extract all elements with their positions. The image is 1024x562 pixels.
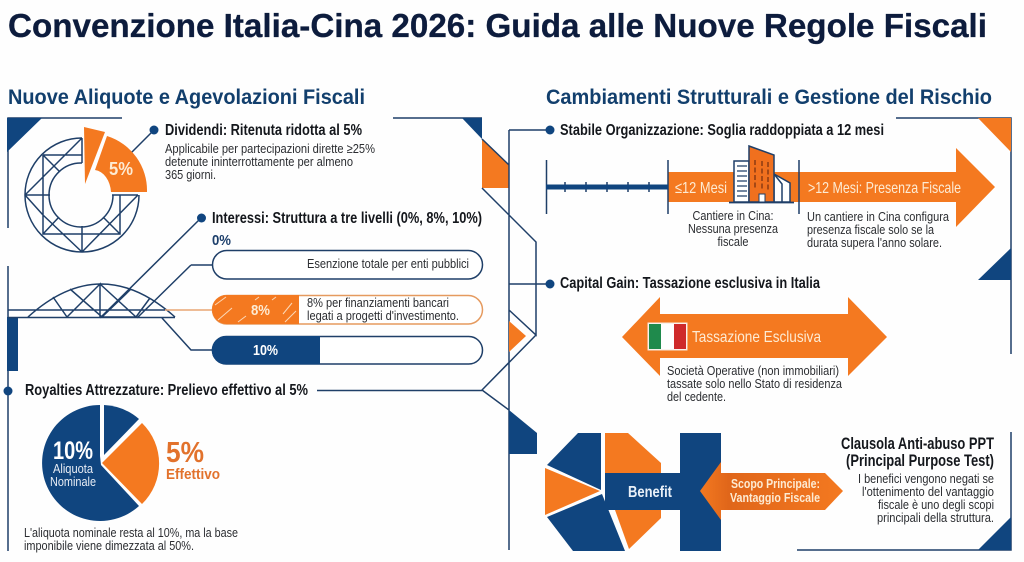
text: clausola PPT: fiscale è uno degli scopi (878, 497, 994, 512)
text: cantiere short: Cantiere in Cina: (692, 208, 774, 223)
text: cantiere short: Nessuna presenza (688, 221, 779, 236)
text: clausola PPT: principali della struttura. (877, 510, 994, 525)
icon: truss bridge (8, 218, 212, 350)
block: interessi heading: Interessi: Struttura a tre livelli (0%, 8%, 10%) (212, 210, 482, 227)
arrow: timeline orange arrow (668, 148, 995, 227)
block: dividendi (132, 122, 375, 182)
diagram: benefit shapes: Scopo Principale: (731, 476, 820, 491)
text: cantiere long: Un cantiere in Cina configura (807, 209, 950, 224)
text: capital gain note: tassate solo nello Stato di residenza (667, 376, 843, 391)
icon: italian flag (648, 323, 687, 350)
chart: royalties pie: 10% (53, 437, 93, 465)
heading: left section: Nuove Aliquote e Agevolazioni Fiscali (8, 85, 365, 109)
diagram: benefit shapes: Benefit (628, 484, 673, 501)
pill: 0%: Esenzione totale per enti pubblici (307, 256, 469, 271)
label: 5%: 5% (109, 159, 133, 179)
chart: timeline: ≤12 Mesi (675, 180, 727, 197)
pill: 0% (212, 250, 482, 279)
label: 5% effettivo (166, 437, 220, 483)
icon: buildings (729, 146, 794, 202)
text: capital gain note: Società Operative (non immobiliari) (667, 363, 839, 378)
pill: 8%: 8% per finanziamenti bancari (307, 295, 449, 310)
text: cantiere long: durata supera l'anno solare. (807, 235, 942, 250)
panel: left frame (7, 118, 482, 551)
text: royalties note: imponibile viene dimezzata al 50%. (24, 538, 194, 553)
chart: royalties pie (42, 405, 159, 521)
text: clausola PPT: I benefici vengono negati se (858, 471, 994, 486)
text: royalties note (24, 525, 238, 553)
block: dividendi: Applicabile per partecipazioni dirette ≥25% (165, 141, 375, 156)
pill: 8%: 8% (251, 302, 270, 319)
text: cantiere long (807, 209, 950, 250)
text: capital gain note (667, 363, 843, 404)
panel: central connector (317, 130, 550, 550)
pill: 10%: 10% (253, 342, 278, 359)
title: Convenzione Italia-Cina 2026: Guida alle Nuove Regole Fiscali (8, 8, 987, 45)
arrow: scopo principale (700, 462, 843, 520)
block: dividendi: Dividendi: Ritenuta ridotta al 5% (165, 122, 362, 139)
arrow: double arrow (622, 297, 887, 376)
block: dividendi: detenute ininterrottamente per almeno (165, 154, 353, 169)
pill: 10% (212, 336, 482, 364)
icon: 5% orange wedge (95, 136, 147, 192)
panel: right frame (797, 118, 1011, 550)
chart: timeline: >12 Mesi: Presenza Fiscale (808, 180, 961, 197)
text: royalties note: L'aliquota nominale resta al 10%, ma la base (24, 525, 238, 540)
block: stabile organizzazione heading: Stabile Organizzazione: Soglia raddoppiata a 12 mesi (560, 122, 884, 139)
diagram: benefit shapes (545, 433, 843, 551)
heading: right section: Cambiamenti Strutturali e Gestione del Rischio (546, 85, 992, 109)
block: dividendi: 365 giorni. (165, 167, 216, 182)
arrow: double arrow: Tassazione Esclusiva (692, 329, 821, 346)
icon: small orange wedge (84, 127, 105, 184)
block: interessi heading (197, 210, 482, 249)
text: clausola PPT: l'ottenimento del vantaggio (862, 484, 994, 499)
label: 5% effettivo: Effettivo (166, 466, 220, 483)
pill: 8% (212, 295, 482, 324)
diagram: benefit shapes: Vantaggio Fiscale (730, 490, 820, 505)
text: clausola PPT (841, 434, 994, 525)
chart: timeline (546, 148, 995, 227)
block: royalties heading: Royalties Attrezzature: Prelievo effettivo al 5% (25, 382, 308, 399)
text: cantiere long: presenza fiscale solo se la (807, 222, 935, 237)
text: capital gain note: del cedente. (667, 389, 726, 404)
chart: royalties pie: Nominale (50, 474, 96, 489)
chart: dividends truss donut (25, 127, 147, 252)
block: interessi heading: 0% (212, 232, 231, 249)
text: cantiere short (688, 208, 779, 249)
text: cantiere short: fiscale (718, 234, 748, 249)
block: capital gain heading: Capital Gain: Tassazione esclusiva in Italia (560, 275, 820, 292)
pill: 8%: legati a progetti d'investimento. (307, 308, 459, 323)
chart: royalties pie: Aliquota (53, 461, 94, 476)
label: 5% effettivo: 5% (166, 437, 204, 469)
